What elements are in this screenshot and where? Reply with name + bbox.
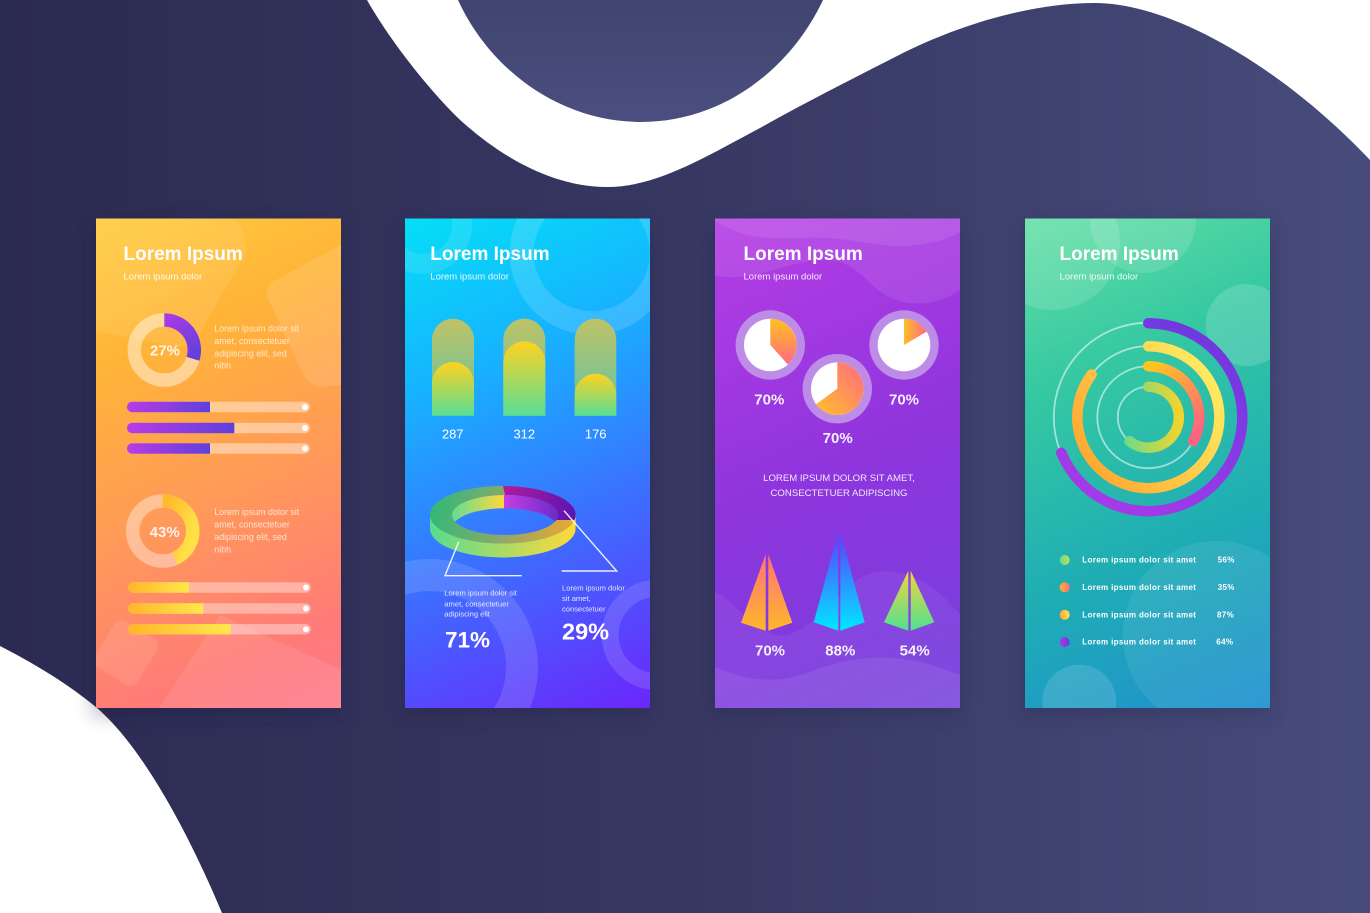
decorative waves xyxy=(715,218,960,708)
bar chart: 312 xyxy=(513,427,535,442)
legend row 64%: Lorem ipsum dolor sit amet xyxy=(1082,638,1196,647)
pie chart center: 70% xyxy=(823,430,853,447)
card shadow xyxy=(711,224,961,716)
title: Lorem Ipsum xyxy=(430,244,550,265)
callout text left: amet, consectetuer xyxy=(444,599,509,608)
donut chart 27%: 27% xyxy=(150,342,180,360)
callout text right xyxy=(562,583,625,644)
pie chart left xyxy=(736,310,805,409)
legend row 64% xyxy=(1060,637,1233,647)
pyramid 88% xyxy=(814,532,865,660)
pyramid 88%: 88% xyxy=(825,643,855,660)
radial chart xyxy=(1054,323,1243,512)
subtitle: Lorem ipsum dolor xyxy=(430,272,509,283)
legend row 64%: 64% xyxy=(1216,638,1233,647)
card shadow xyxy=(1021,224,1271,716)
subtitle: Lorem ipsum dolor xyxy=(744,272,822,283)
card shadow xyxy=(401,224,651,716)
description: Lorem ipsum dolor sit xyxy=(214,507,300,517)
pyramid 54% xyxy=(884,571,934,660)
callout line right xyxy=(562,511,617,571)
description: nibh xyxy=(214,361,231,371)
title: Lorem Ipsum xyxy=(1060,244,1179,265)
panel: purple pies and pyramids xyxy=(715,218,960,708)
description: Lorem ipsum dolor sit xyxy=(214,324,300,334)
legend row 56%: Lorem ipsum dolor sit amet xyxy=(1082,556,1196,565)
pyramid 70%: 70% xyxy=(755,643,785,660)
callout text left xyxy=(444,589,518,652)
pie chart left: 70% xyxy=(754,392,784,409)
callout text right: 29% xyxy=(562,618,609,644)
legend row 35% xyxy=(1060,582,1235,592)
progress bars yellow xyxy=(128,582,311,634)
bar chart: 287 xyxy=(442,427,464,442)
legend row 56%: 56% xyxy=(1218,556,1235,565)
callout line left xyxy=(445,542,522,576)
description: nibh xyxy=(214,544,231,554)
pyramid 70% xyxy=(741,554,792,660)
legend row 56% xyxy=(1060,555,1235,565)
callout text left: adipiscing elit xyxy=(444,610,491,619)
donut chart 43% xyxy=(133,501,193,561)
bar chart: 176 xyxy=(585,427,607,442)
progress bars purple xyxy=(127,402,310,454)
subtitle: Lorem ipsum dolor xyxy=(124,272,202,283)
panel: blue bars and 3D ring xyxy=(405,218,650,708)
legend row 87%: 87% xyxy=(1217,610,1234,619)
callout text right: Lorem ipsum dolor xyxy=(562,583,625,592)
callout text left: Lorem ipsum dolor sit xyxy=(444,589,518,598)
decorative circles xyxy=(1025,218,1270,708)
pyramid 54%: 54% xyxy=(900,643,930,660)
pie chart right xyxy=(869,310,939,409)
description: adipiscing elit, sed xyxy=(214,348,287,358)
title: Lorem Ipsum xyxy=(744,244,863,265)
legend row 35%: Lorem ipsum dolor sit amet xyxy=(1082,583,1196,592)
callout text right: sit amet, xyxy=(562,594,591,603)
pie chart center xyxy=(803,354,872,447)
legend row 35%: 35% xyxy=(1218,583,1235,592)
decorative translucent shapes xyxy=(90,210,350,712)
subtitle: Lorem ipsum dolor xyxy=(1060,272,1138,283)
decorative rings xyxy=(405,218,650,708)
description: amet, consectetuer xyxy=(214,336,290,346)
donut chart 27% xyxy=(134,320,194,380)
bar chart xyxy=(432,319,616,442)
description: adipiscing elit, sed xyxy=(214,532,287,542)
panel: green radial chart and legend xyxy=(1025,218,1270,708)
callout text right: consectetuer xyxy=(562,604,606,613)
center text block: LOREM IPSUM DOLOR SIT AMET, xyxy=(763,473,915,484)
pie chart right: 70% xyxy=(889,392,919,409)
3D ring chart xyxy=(430,480,576,557)
card shadow xyxy=(92,224,342,716)
panel: orange donut and progress bars xyxy=(90,210,350,712)
center text block: CONSECTETUER ADIPISCING xyxy=(770,488,908,499)
background: top circle xyxy=(458,0,823,122)
background: white top wave xyxy=(367,0,1370,187)
background: white bottom-left blob xyxy=(0,646,222,913)
donut chart 43%: 43% xyxy=(150,524,180,541)
legend row 87%: Lorem ipsum dolor sit amet xyxy=(1082,610,1196,619)
legend row 87% xyxy=(1060,610,1234,620)
title: Lorem Ipsum xyxy=(124,244,243,265)
callout text left: 71% xyxy=(445,627,490,652)
description: amet, consectetuer xyxy=(214,520,290,530)
